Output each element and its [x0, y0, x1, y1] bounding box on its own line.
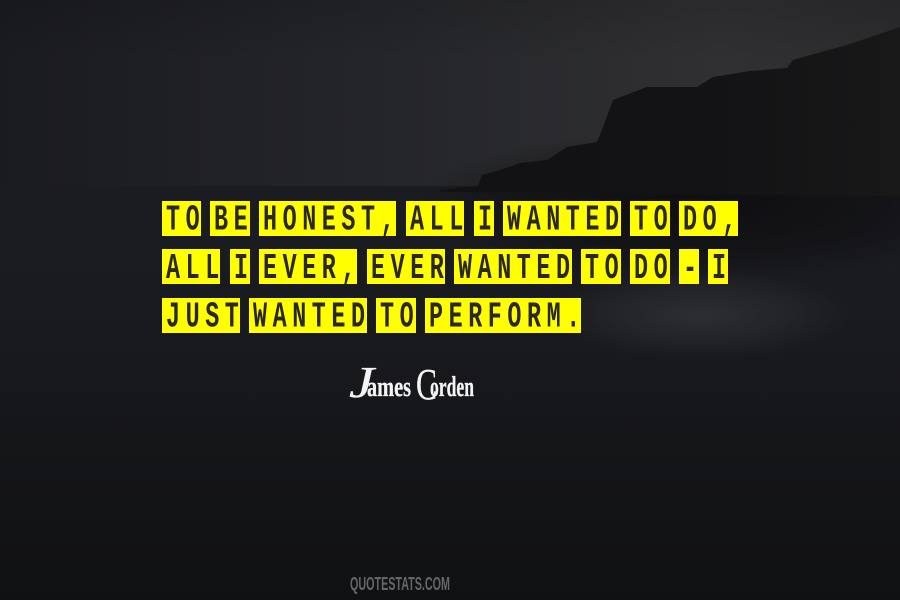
line 1: HONEST,	[263, 201, 400, 241]
line 2: -	[683, 250, 703, 290]
author name	[349, 358, 474, 409]
line 2: EVER	[371, 250, 449, 290]
line 1: I	[478, 201, 498, 241]
cliff reflection on water	[410, 130, 900, 280]
cliff silhouette	[440, 27, 900, 196]
line 2	[162, 249, 732, 290]
line 2: EVER,	[263, 250, 361, 290]
line 2: TO	[585, 250, 624, 290]
line 3: TO	[380, 298, 419, 338]
line 3: WANTED	[253, 298, 371, 338]
line 3: PERFORM.	[429, 298, 586, 338]
background: dark water	[0, 186, 900, 600]
line 1: DO,	[683, 201, 742, 241]
background: night sky	[0, 0, 900, 190]
line 1: TO	[634, 201, 673, 241]
quote	[162, 201, 742, 338]
line 2: DO	[634, 250, 673, 290]
line 1: BE	[214, 201, 253, 241]
line 3: JUST	[166, 298, 244, 338]
line 1: ALL	[410, 201, 469, 241]
line 2: I	[234, 250, 254, 290]
footer: site name: QUOTESTATS.COM	[350, 574, 450, 594]
author name: orden	[430, 372, 474, 403]
line 2: ALL	[166, 250, 225, 290]
line 1: TO	[166, 201, 205, 241]
water highlight	[550, 270, 850, 360]
line 3	[162, 298, 586, 338]
line 1: WANTED	[507, 201, 625, 241]
line 2: I	[712, 250, 732, 290]
line 1	[162, 201, 742, 241]
author name: J	[349, 358, 377, 407]
author name: ames	[367, 372, 411, 403]
line 2: WANTED	[458, 250, 576, 290]
author name: C	[416, 360, 437, 409]
